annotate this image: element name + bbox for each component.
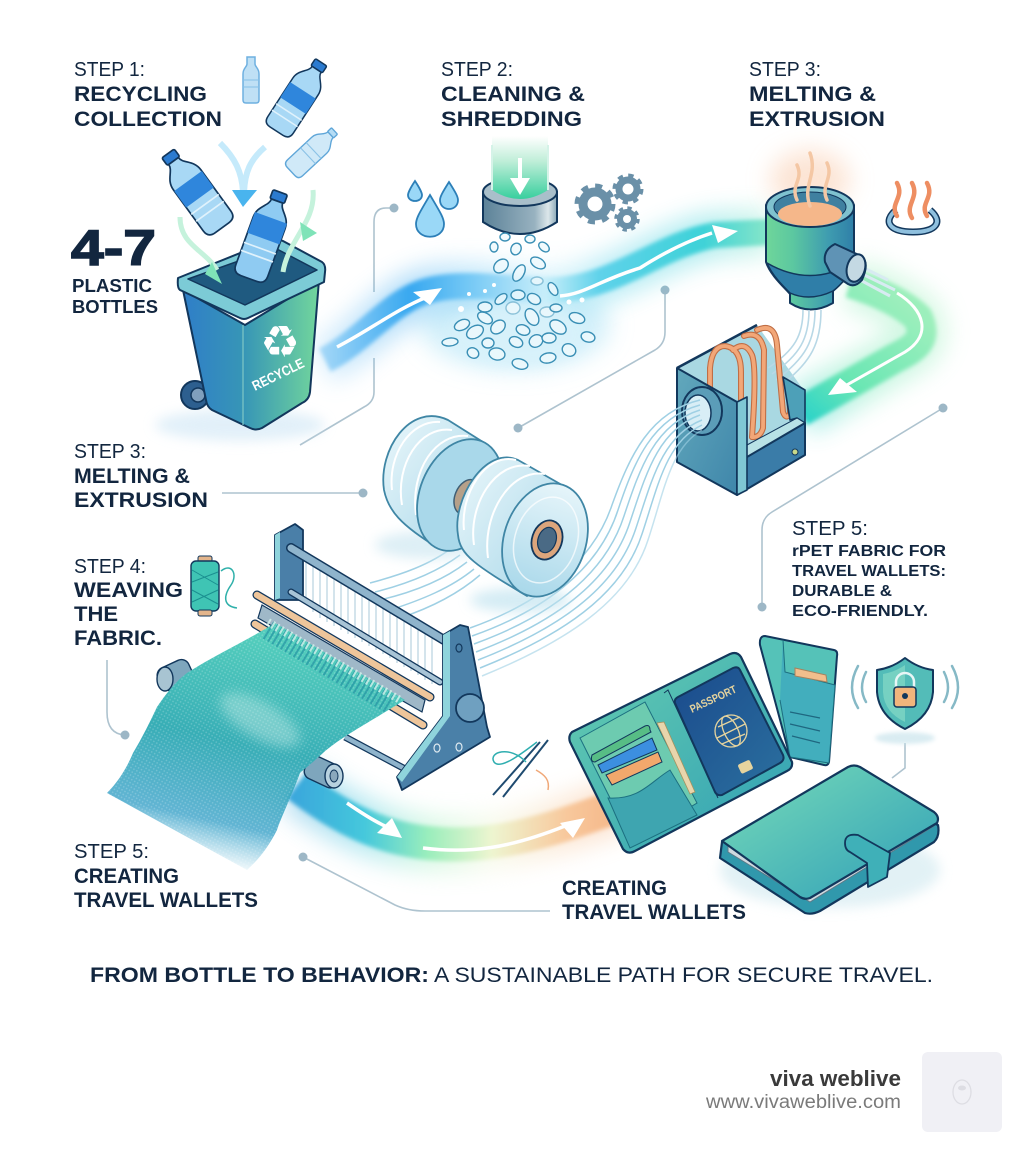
icon: needles xyxy=(493,740,548,797)
tagline: A SUSTAINABLE PATH FOR SECURE TRAVEL. xyxy=(434,964,933,987)
loom xyxy=(255,524,444,770)
spout strands xyxy=(825,244,895,296)
step 3 left heading xyxy=(74,441,208,512)
icon: falling bottle left xyxy=(154,143,236,238)
passport xyxy=(675,667,784,795)
loom rollers xyxy=(155,657,344,790)
step 3 heading: STEP 3: xyxy=(749,59,821,81)
icon: bottle entering bin xyxy=(233,186,296,284)
step 5 right callout: ECO-FRIENDLY. xyxy=(792,603,928,620)
heater coil machine xyxy=(677,310,821,495)
step 2 heading: STEP 2: xyxy=(441,59,513,81)
footer brand: viva weblive xyxy=(770,1066,901,1091)
bottle count stat xyxy=(71,220,158,317)
footer brand: www.vivaweblive.com xyxy=(705,1092,901,1113)
tagline: FROM BOTTLE TO BEHAVIOR: xyxy=(90,964,429,987)
step 2 heading xyxy=(441,59,585,131)
icon: falling bottle top right xyxy=(264,54,334,139)
icon: small flat bottle xyxy=(243,57,259,103)
recycle label: RECYCLE xyxy=(249,355,307,394)
step 5 right callout: DURABLE & xyxy=(792,583,892,600)
step 3 heading xyxy=(749,59,885,131)
step 3 left heading: STEP 3: xyxy=(74,441,146,463)
leader lines xyxy=(107,204,948,911)
step 1 heading: RECYCLING xyxy=(74,83,207,106)
bottle count stat: PLASTIC xyxy=(72,276,152,296)
step 5 right callout xyxy=(792,518,946,620)
step 4 heading: FABRIC. xyxy=(74,627,162,650)
creating wallets label: TRAVEL WALLETS xyxy=(562,901,746,924)
step 4 heading: STEP 4: xyxy=(74,556,146,578)
woven fabric xyxy=(107,622,405,870)
recycle symbol: ♻ xyxy=(260,317,300,368)
flow arrow: bin to extruder xyxy=(322,225,770,370)
shredder tube xyxy=(483,136,557,234)
step 1 heading: COLLECTION xyxy=(74,108,222,131)
icon: heat symbol xyxy=(889,183,937,232)
step 1 heading: STEP 1: xyxy=(74,59,145,81)
shredded plastic flakes xyxy=(442,233,596,371)
step 3 heading: EXTRUSION xyxy=(749,108,885,131)
bottle count stat: BOTTLES xyxy=(72,297,158,317)
step 5 right callout: STEP 5: xyxy=(792,518,868,540)
melting hopper xyxy=(766,150,854,310)
globe emblem xyxy=(715,714,747,748)
step 5 right callout: rPET FABRIC FOR xyxy=(792,543,946,560)
step 4 heading: WEAVING xyxy=(74,579,183,602)
step 5 left heading xyxy=(74,841,258,912)
icon: water drops xyxy=(408,181,458,237)
arrows into bin xyxy=(180,143,317,284)
recycling bin xyxy=(155,240,325,441)
step 2 heading: CLEANING & xyxy=(441,83,585,106)
open wallet xyxy=(569,653,792,853)
icon: falling light bottle xyxy=(284,123,342,180)
step 5 right callout: TRAVEL WALLETS: xyxy=(792,563,946,580)
step 5 left heading: TRAVEL WALLETS xyxy=(74,889,258,912)
passport: PASSPORT xyxy=(688,684,739,716)
front spool xyxy=(457,457,602,608)
step 1 heading xyxy=(74,59,222,131)
icon: gears xyxy=(577,176,642,230)
filament strands xyxy=(370,400,702,676)
back card sleeve xyxy=(760,636,837,765)
yarn spools xyxy=(375,416,602,612)
flow arrow: loom to wallet xyxy=(297,785,620,850)
step 5 left heading: STEP 5: xyxy=(74,841,149,863)
tagline xyxy=(90,964,933,987)
creating wallets label xyxy=(562,877,746,924)
icon: security shield xyxy=(852,658,958,744)
step 4 heading: THE xyxy=(74,603,118,626)
clasp strap xyxy=(845,835,890,887)
step 3 heading: MELTING & xyxy=(749,83,876,106)
step 2 heading: SHREDDING xyxy=(441,108,582,131)
loom right frame xyxy=(397,625,490,790)
creating wallets label: CREATING xyxy=(562,877,667,900)
bottle count stat: 4-7 xyxy=(71,220,156,276)
step 3 left heading: MELTING & xyxy=(74,465,190,488)
step 3 left heading: EXTRUSION xyxy=(74,489,208,512)
back spool xyxy=(383,416,519,564)
closed wallet xyxy=(720,766,940,914)
footer brand xyxy=(705,1066,901,1113)
flow arrow: extruder to heater xyxy=(800,283,922,412)
step 4 heading xyxy=(74,556,183,650)
icon: thread spool xyxy=(191,556,237,616)
footer logo tile xyxy=(922,1052,1002,1132)
step 5 left heading: CREATING xyxy=(74,865,179,888)
